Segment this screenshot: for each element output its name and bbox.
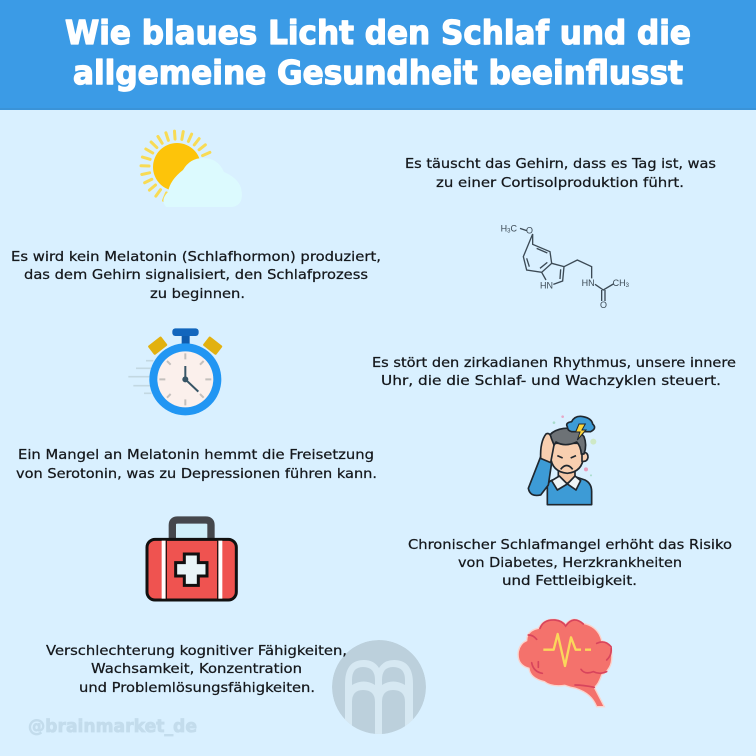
- text: chronic sleep deficit: Chronischer Schlafmangel erhöht das Risiko: [408, 537, 732, 553]
- text: serotonin: [16, 447, 377, 482]
- text: cognition: Wachsamkeit, Konzentration: [91, 661, 302, 677]
- icon: melatonin molecule: C: [511, 224, 518, 234]
- text: chronic sleep deficit: und Fettleibigkeit.: [502, 573, 637, 589]
- icon: melatonin molecule: O: [600, 300, 607, 310]
- icon: brain: [518, 619, 612, 707]
- watermark logo: [332, 640, 426, 736]
- text: cortisol: zu einer Cortisolproduktion führt.: [436, 175, 684, 191]
- text: melatonin: zu beginnen.: [150, 286, 245, 302]
- text: circadian rhythm: Es stört den zirkadianen Rhythmus, unsere innere: [372, 355, 736, 371]
- icon: melatonin molecule: 3: [507, 229, 511, 235]
- text: melatonin: [11, 249, 381, 302]
- text: serotonin: von Serotonin, was zu Depressionen führen kann.: [16, 466, 377, 482]
- text: melatonin: Es wird kein Melatonin (Schlafhormon) produziert,: [11, 249, 381, 265]
- text: cognition: [46, 643, 347, 696]
- icon: melatonin molecule: H: [501, 224, 507, 234]
- text: circadian rhythm: Uhr, die die Schlaf- und Wachzyklen steuert.: [381, 373, 721, 389]
- icon: melatonin molecule: HN: [582, 278, 595, 288]
- icon: first aid kit: [147, 520, 236, 600]
- icon: stopwatch: [128, 328, 223, 415]
- text: melatonin: das dem Gehirn signalisiert, den Schlafprozess: [24, 267, 368, 283]
- icon: melatonin molecule: HN: [540, 281, 553, 291]
- icon: sun behind cloud: [141, 131, 242, 207]
- icon: melatonin molecule: 3: [626, 283, 630, 289]
- watermark handle: @brainmarket_de: [28, 716, 197, 737]
- title banner: allgemeine Gesundheit beeinflusst: [73, 53, 683, 92]
- icon: man with headache: [528, 415, 596, 505]
- text: chronic sleep deficit: von Diabetes, Herzkrankheiten: [458, 555, 682, 571]
- text: chronic sleep deficit: [408, 537, 732, 589]
- title banner: Wie blaues Licht den Schlaf und die: [65, 13, 691, 52]
- text: cortisol: [405, 156, 716, 191]
- icon: melatonin molecule: O: [526, 225, 533, 235]
- icon: melatonin molecule: [501, 224, 630, 310]
- text: cortisol: Es täuscht das Gehirn, dass es Tag ist, was: [405, 156, 716, 172]
- text: circadian rhythm: [372, 355, 736, 389]
- title banner: [0, 0, 756, 110]
- icon: melatonin molecule: CH: [613, 278, 626, 288]
- text: cognition: und Problemlösungsfähigkeiten.: [79, 680, 315, 696]
- text: serotonin: Ein Mangel an Melatonin hemmt die Freisetzung: [18, 447, 374, 463]
- text: cognition: Verschlechterung kognitiver Fähigkeiten,: [46, 643, 347, 659]
